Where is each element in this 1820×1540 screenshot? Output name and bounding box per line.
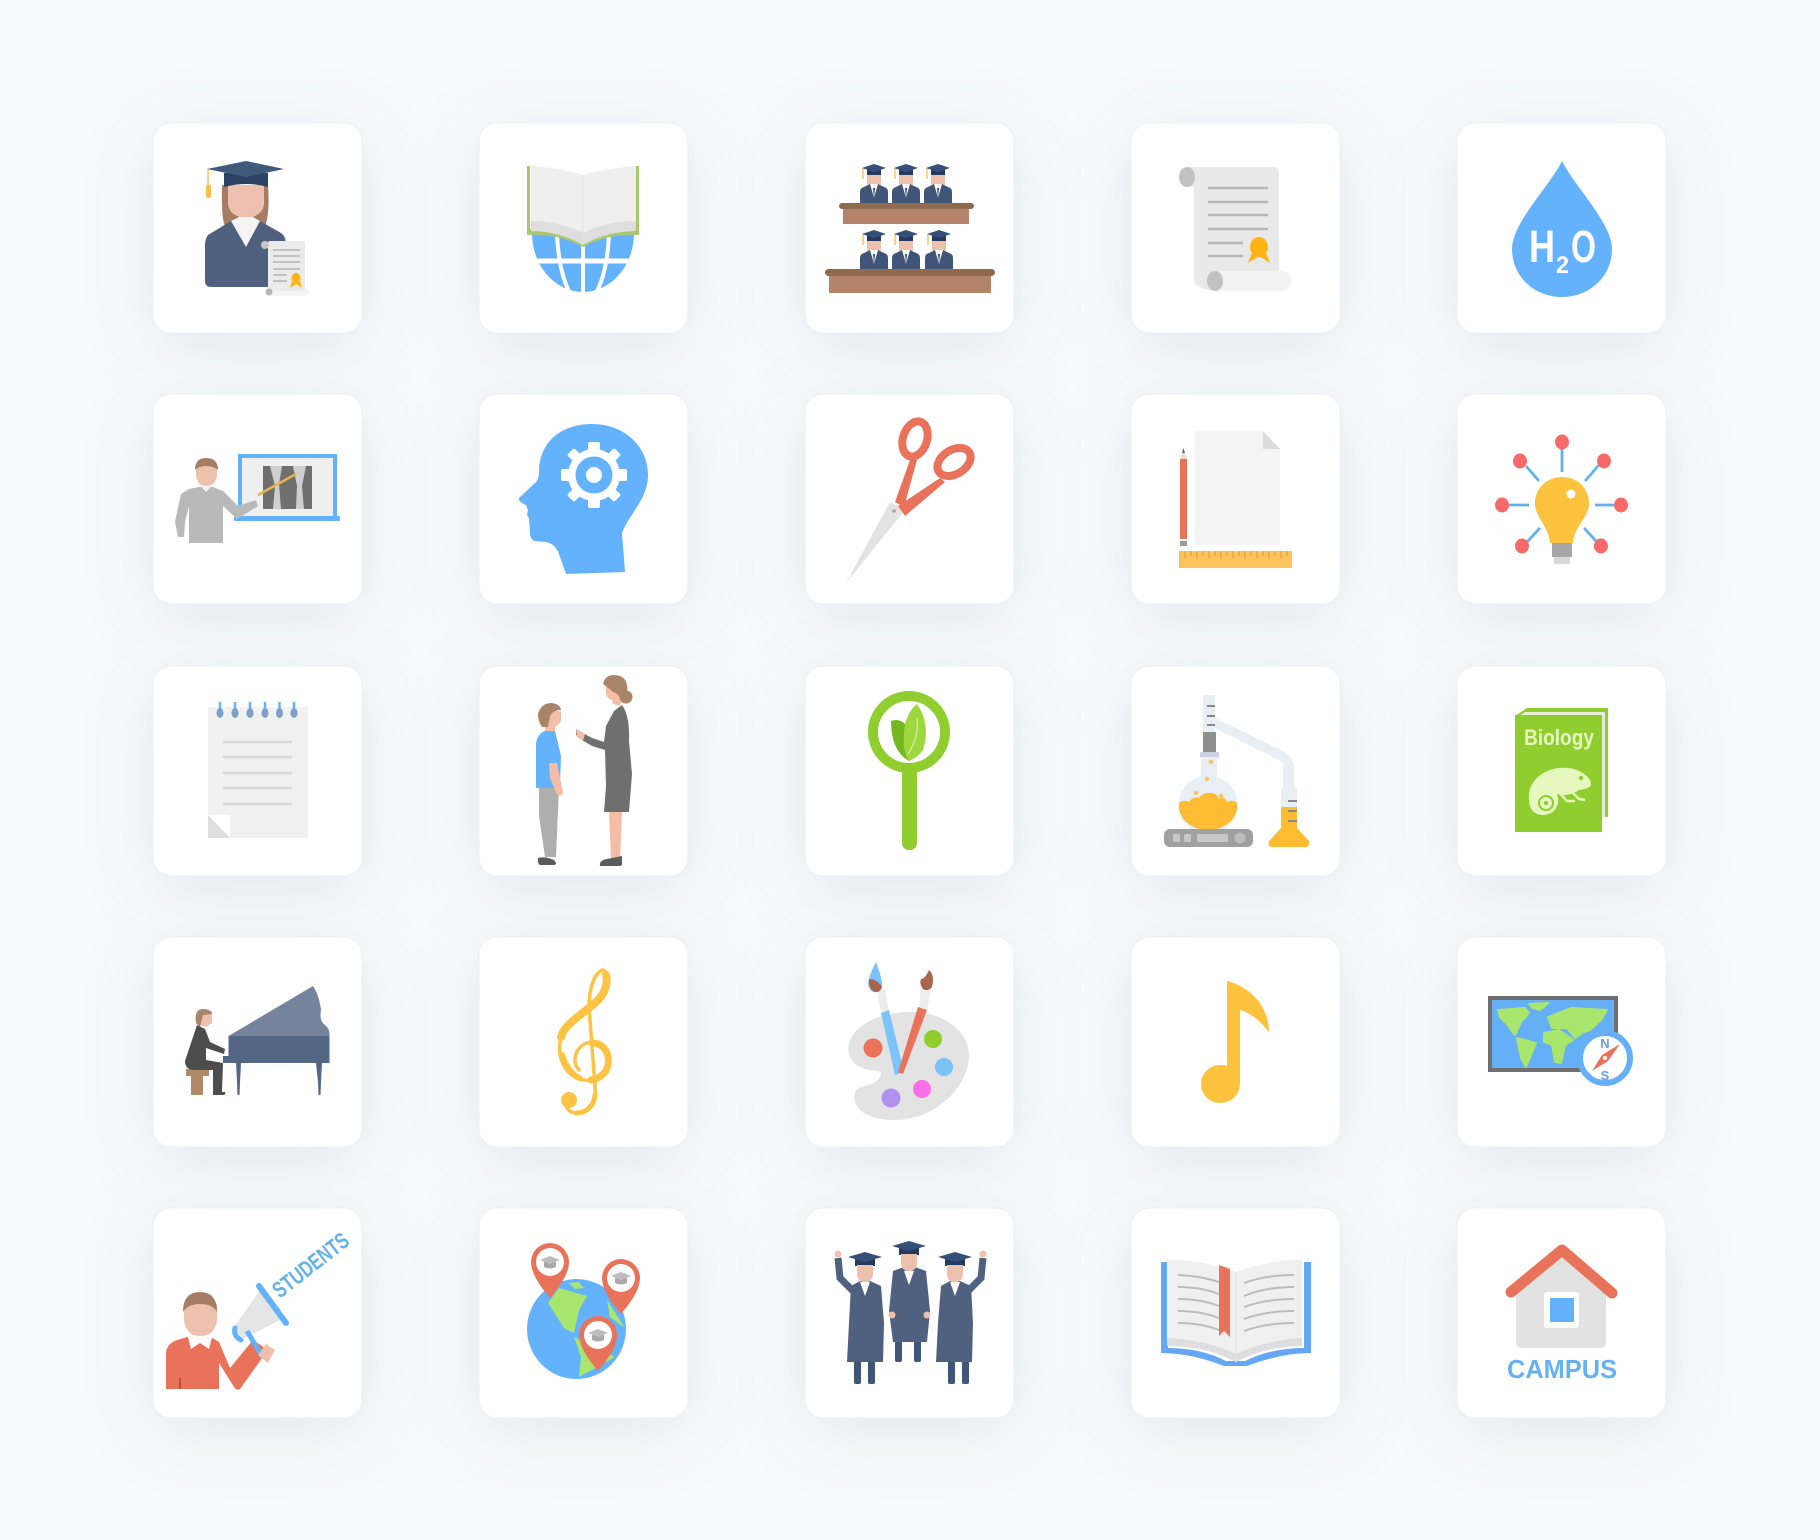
icon: scissors [846,418,976,583]
icon: magnifier and leaf [873,696,945,850]
panel: teacher and x-ray [153,394,362,604]
icon: paper sheet [1195,431,1280,545]
icon: boy student [536,703,563,865]
icon: three graduates [834,1241,986,1384]
panel: head with gear [479,394,688,604]
icon: chameleon [1529,768,1591,815]
panel: graduates at desks [805,123,1014,333]
icon: teacher pointing at x-ray [175,456,340,543]
icon: palette with brushes [848,962,969,1120]
icon: man with megaphone [166,1227,354,1390]
icon: H2O drop: H [1529,221,1555,272]
icon: open book with bookmark [1161,1259,1311,1366]
panel: light bulb [1457,394,1666,604]
icon: eighth note [1201,981,1269,1103]
icon: location pins [531,1243,640,1371]
book title: Biology [1524,725,1595,750]
icon: compass [1580,1033,1630,1083]
panel: water drop [1457,123,1666,333]
panel: campus [1457,1208,1666,1418]
icon: world map [1490,998,1616,1070]
icon: graduate with diploma [205,161,309,296]
campus label: CAMPUS [1507,1354,1617,1384]
panel: graduate woman [153,123,362,333]
icon: woman teacher [576,675,632,866]
icon: flask, condenser and beaker [1164,695,1309,847]
panel: world map and compass [1457,937,1666,1147]
icon: campus house [1511,1250,1612,1348]
panel: treble clef [479,937,688,1147]
panel: distillation apparatus [1131,666,1340,876]
panel: open book [1131,1208,1340,1418]
icon: two rows of graduates [825,164,995,293]
panel: book and globe [479,123,688,333]
icon: spiral notepad [208,702,308,838]
panel: paint palette [805,937,1014,1147]
icon: open book on globe [527,166,639,293]
panel: scroll certificate [1131,123,1340,333]
icon: grand piano [223,986,330,1095]
panel: notepad [153,666,362,876]
icon: compass: N [1600,1036,1610,1051]
icon: treble clef [560,970,609,1113]
icon: head silhouette with gear [519,424,648,574]
panel: teacher and student [479,666,688,876]
icon: biology book [1515,708,1608,832]
icon: globe [527,1279,626,1379]
panel: scissors [805,394,1014,604]
icon: pencil [1180,448,1187,546]
icon: bulb with nodes [1495,434,1628,564]
icon: H2O drop: O [1571,221,1596,272]
icon: H2O drop [1512,161,1612,297]
icon: scroll with seal [1179,167,1291,291]
icon: H2O drop: 2 [1556,252,1569,279]
icon: compass: S [1601,1068,1610,1083]
panel: pianist [153,937,362,1147]
panel: three graduates celebrating [805,1208,1014,1418]
panel: globe with location pins [479,1208,688,1418]
panel: paper, pencil and ruler [1131,394,1340,604]
panel: music note [1131,937,1340,1147]
icon: pianist and stool [185,1009,225,1095]
megaphone text: STUDENTS [267,1227,354,1303]
panel: biology book [1457,666,1666,876]
icon: ruler [1179,551,1292,568]
panel: megaphone speaker [153,1208,362,1418]
panel: magnifier with leaf [805,666,1014,876]
